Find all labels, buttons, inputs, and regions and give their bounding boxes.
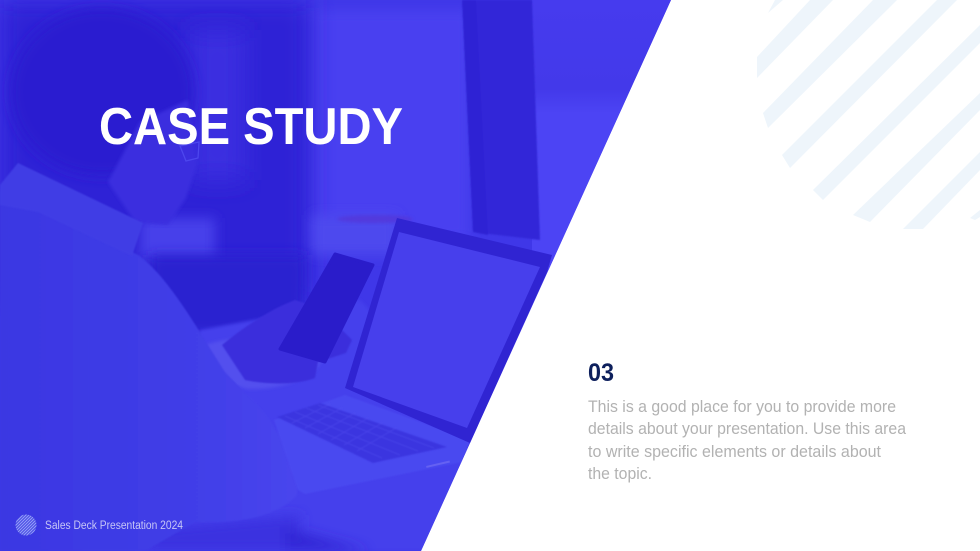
- table surface: [200, 302, 478, 551]
- footer logo icon: [16, 514, 36, 536]
- hand holding phone: [222, 300, 352, 384]
- body text: details about your presentation. Use this area: [588, 419, 907, 438]
- table shadow at the bottom edge: [152, 516, 354, 551]
- title: CASE STUDY: [99, 98, 403, 156]
- smartphone: [280, 254, 373, 362]
- decorative striped shape: [757, 0, 980, 229]
- man's hair and head: [10, 8, 199, 225]
- keyboard: [277, 403, 447, 463]
- laptop: [274, 218, 552, 494]
- laptop screen: [353, 232, 540, 428]
- body text: the topic.: [588, 464, 652, 483]
- saucer beside the hand: [208, 340, 320, 389]
- body text: This is a good place for you to provide more: [588, 397, 896, 416]
- dark window pillar: [462, 0, 540, 240]
- man's sweater: [0, 163, 297, 551]
- ports on laptop side: [426, 461, 450, 468]
- section number: 03: [588, 359, 614, 387]
- laptop base: [274, 395, 470, 494]
- footer text: Sales Deck Presentation 2024: [45, 520, 184, 532]
- body text: to write specific elements or details about: [588, 442, 881, 461]
- laptop screen bezel: [345, 218, 552, 443]
- panel: blue duotone photo of man with phone and laptop: [0, 0, 682, 551]
- photo background wall: [0, 0, 682, 551]
- body text: [588, 397, 907, 483]
